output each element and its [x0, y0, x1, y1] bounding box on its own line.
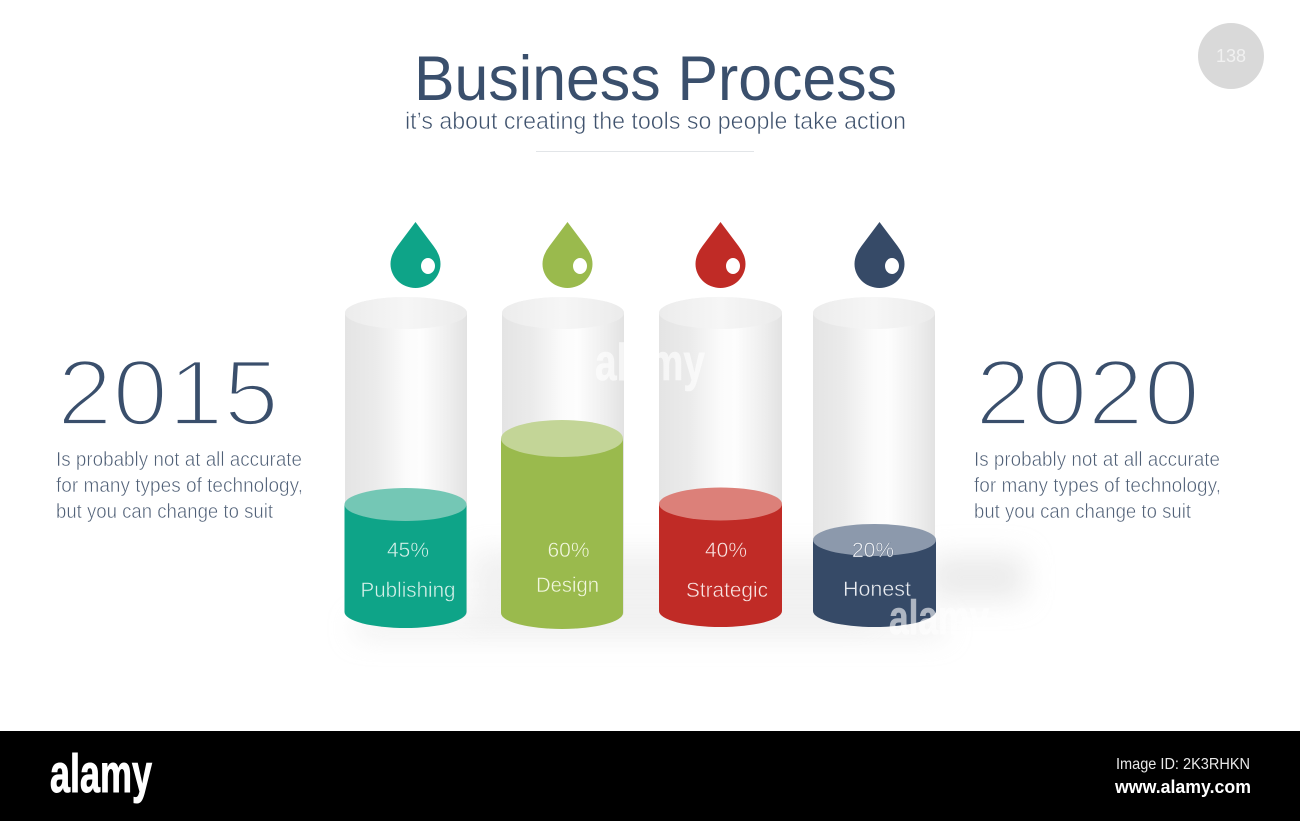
watermark marks: alamy [889, 592, 989, 645]
navy fill level [813, 524, 936, 627]
value label: 45% [387, 539, 429, 562]
value label: 20% [852, 539, 894, 562]
description right: for many types of technology, [974, 475, 1221, 497]
column: Strategic 40% [659, 222, 782, 627]
column: Design 60% [501, 222, 624, 629]
description right: Is probably not at all accurate [974, 449, 1220, 471]
right year block [974, 340, 1221, 523]
description left: for many types of technology, [56, 475, 303, 497]
icon: green drop [542, 222, 592, 288]
description left [56, 449, 303, 523]
value label: 40% [705, 539, 747, 562]
category label: Design [536, 573, 599, 597]
left year block [56, 340, 303, 523]
description right [974, 449, 1221, 523]
website: www.alamy.com [1114, 777, 1251, 797]
category label: Honest [843, 577, 911, 601]
description right: but you can change to suit [974, 501, 1191, 523]
page number badge: 138 [1216, 46, 1246, 66]
description left: Is probably not at all accurate [56, 449, 302, 471]
glass tube [345, 297, 467, 628]
footer logo: alamy [50, 744, 152, 804]
year 2020: 2020 [975, 340, 1200, 445]
icon: teal drop [390, 222, 440, 288]
column: Publishing 45% [344, 222, 467, 628]
glass tube [813, 297, 935, 627]
image id: Image ID: 2K3RHKN [1116, 756, 1250, 773]
year 2015: 2015 [57, 340, 279, 445]
category label: Publishing [360, 578, 456, 602]
icon: navy drop [854, 222, 904, 288]
icon: red drop [696, 222, 746, 288]
title: Business Process [414, 44, 897, 114]
green fill level [501, 420, 623, 629]
value label: 60% [547, 539, 590, 562]
title divider [536, 151, 754, 152]
column: Honest 20% [813, 222, 936, 627]
page number badge [1198, 23, 1264, 89]
teal fill level [344, 488, 466, 628]
subtitle: it’s about creating the tools so people take action [405, 108, 906, 135]
description left: but you can change to suit [56, 501, 273, 523]
glass tube [659, 297, 782, 627]
red fill level [659, 488, 782, 627]
floor shadow [355, 550, 1025, 636]
watermark marks [595, 334, 989, 645]
category label: Strategic [686, 578, 768, 602]
glass tube [502, 297, 624, 628]
footer bar [0, 731, 1300, 821]
watermark marks: alamy [595, 334, 705, 392]
